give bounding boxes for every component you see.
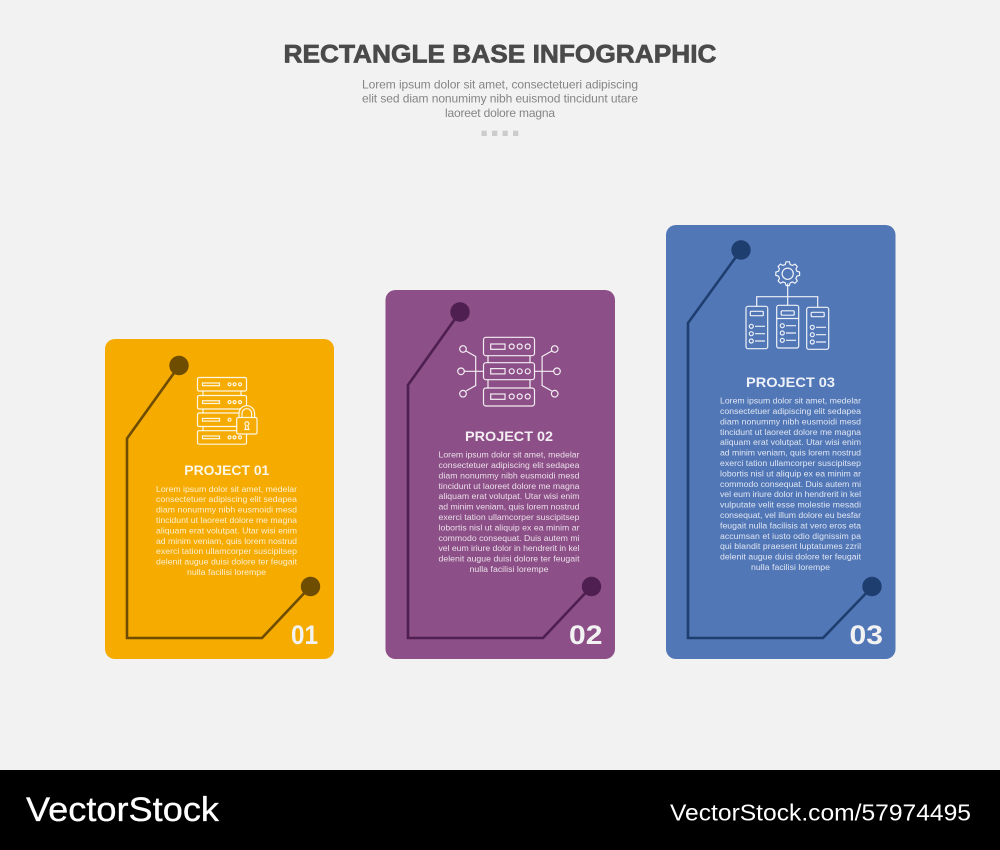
panel: project 02 bbox=[386, 290, 615, 659]
text block 02: aliquam erat volutpat. Utar wisi enim bbox=[438, 491, 580, 501]
number 01: 01 bbox=[291, 620, 318, 650]
text block 02: tincidunt ut laoreet dolore me magna bbox=[438, 481, 580, 491]
text block 03: diam nonummy nibh eusmoidi mesd bbox=[720, 416, 861, 426]
panel: project 03 bbox=[666, 225, 896, 659]
subtitle: Lorem ipsum dolor sit amet, consectetueri adipiscing bbox=[362, 78, 638, 92]
text block 02: exerci tation ullamcorper suscipitsep bbox=[438, 512, 580, 522]
pagination dots bbox=[482, 131, 518, 136]
text block 01: nulla facilisi lorempe bbox=[187, 567, 266, 577]
subtitle: elit sed diam nonumimy nibh euismod tincidunt utare bbox=[362, 92, 638, 106]
text block 03: nulla facilisi lorempe bbox=[751, 562, 830, 572]
connector line 02 bbox=[408, 302, 601, 638]
text block 01: aliquam erat volutpat. Utar wisi enim bbox=[156, 525, 297, 535]
text block 02: Lorem ipsum dolor sit amet, medelar bbox=[438, 450, 580, 460]
text block 02: consectetuer adipiscing elit sedapea bbox=[438, 460, 580, 470]
text block 03: tincidunt ut laoreet dolore me magna bbox=[720, 427, 861, 437]
text block 03: vel eum iriure dolor in hendrerit in kel bbox=[720, 489, 861, 499]
text block 02: ad minim veniam, quis lorem nostrud bbox=[438, 502, 580, 512]
text block 01: delenit augue duisi dolore ter feugait bbox=[156, 557, 298, 567]
footer url: VectorStock.com/57974495 bbox=[670, 800, 971, 826]
footer logo: VectorStock bbox=[26, 791, 220, 829]
text block 02 bbox=[438, 450, 580, 574]
subtitle bbox=[362, 78, 638, 120]
text block 03: commodo consequat. Duis autem mi bbox=[720, 479, 861, 489]
connector line 03 bbox=[688, 240, 882, 638]
text block 02: nulla facilisi lorempe bbox=[470, 564, 549, 574]
text block 01: tincidunt ut laoreet dolore me magna bbox=[156, 515, 297, 525]
text block 03: feugait nulla facilisis at vero eros eta bbox=[720, 520, 861, 530]
heading: project 02: PROJECT 02 bbox=[465, 428, 553, 444]
text block 03: qui blandit praesent luptatumes zzril bbox=[720, 541, 861, 551]
icon: gear with server hierarchy bbox=[746, 262, 829, 349]
text block 03: ad minim veniam, quis lorem nostrud bbox=[720, 448, 861, 458]
heading: project 03: PROJECT 03 bbox=[746, 374, 835, 390]
card background 02 bbox=[386, 290, 615, 659]
panel: project 01 bbox=[105, 339, 334, 659]
text block 03: exerci tation ullamcorper suscipitsep bbox=[720, 458, 861, 468]
text block 03: delenit augue duisi dolore ter feugait bbox=[720, 552, 862, 562]
footer bar bbox=[0, 770, 1000, 850]
text block 03: consequat, vel illum dolore eu besfar bbox=[720, 510, 861, 520]
text block 01: ad minim veniam, quis lorem nostrud bbox=[156, 536, 297, 546]
text block 01: diam nonummy nibh eusmoidi mesd bbox=[156, 505, 297, 515]
text block 03: lobortis nisl ut aliquip ex ea minim ar bbox=[720, 468, 861, 478]
text block 03: aliquam erat volutpat. Utar wisi enim bbox=[720, 437, 861, 447]
text block 03: consectetuer adipiscing elit sedapea bbox=[720, 406, 861, 416]
text block 02: vel eum iriure dolor in hendrerit in kel bbox=[438, 543, 580, 553]
text block 03: accumsan et iusto odio dignissim pa bbox=[720, 531, 861, 541]
text block 02: lobortis nisl ut aliquip ex ea minim ar bbox=[438, 522, 580, 532]
text block 01 bbox=[156, 484, 298, 577]
text block 01: exerci tation ullamcorper suscipitsep bbox=[156, 546, 297, 556]
text block 01: consectetuer adipiscing elit sedapea bbox=[156, 494, 297, 504]
number 03: 03 bbox=[850, 620, 883, 650]
title: RECTANGLE BASE INFOGRAPHIC bbox=[284, 40, 716, 68]
number 02: 02 bbox=[569, 620, 602, 650]
subtitle: laoreet dolore magna bbox=[445, 106, 555, 120]
connector line 01 bbox=[127, 356, 320, 638]
icon: server with padlock bbox=[198, 378, 257, 444]
text block 02: diam nonummy nibh eusmoidi mesd bbox=[438, 470, 580, 480]
icon: server network bbox=[458, 337, 560, 406]
text block 02: commodo consequat. Duis autem mi bbox=[438, 533, 580, 543]
card background 01 bbox=[105, 339, 334, 659]
text block 03: Lorem ipsum dolor sit amet, medelar bbox=[720, 396, 861, 406]
card background 03 bbox=[666, 225, 896, 659]
text block 03 bbox=[720, 396, 862, 572]
text block 02: delenit augue duisi dolore ter feugait bbox=[438, 554, 580, 564]
text block 03: vulputate velit esse molestie mesadi bbox=[720, 500, 861, 510]
text block 01: Lorem ipsum dolor sit amet, medelar bbox=[156, 484, 297, 494]
heading: project 01: PROJECT 01 bbox=[184, 462, 270, 478]
